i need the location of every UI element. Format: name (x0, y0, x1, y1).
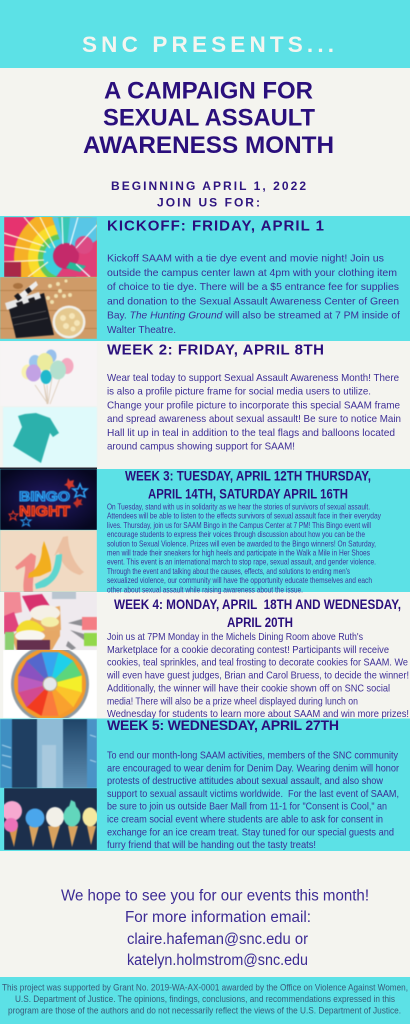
week 4 body text (106, 632, 409, 720)
subtitle: date and invitation: JOIN US FOR: (157, 196, 260, 210)
footer: grant disclaimer (0, 977, 410, 1024)
week 2 body text: around campus showing support for SAAM! (107, 442, 295, 453)
header text: SNC presents: SNC PRESENTS... (82, 32, 334, 57)
week 5 body text (107, 751, 400, 851)
image: tie dye (4, 217, 97, 277)
disclaimer text (2, 983, 408, 1015)
image: decorated cookies (4, 590, 97, 650)
week 5 heading: WEEK 5: WEDNESDAY, APRIL 27TH (107, 717, 339, 733)
week 5 body text: furry friend that will be handing out the tasty treats! (107, 840, 316, 851)
week 3 body text: other about sexual assault while raising awareness about the issue. (107, 585, 303, 594)
title: AWARENESS MONTH (83, 132, 334, 159)
title: SEXUAL ASSAULT (103, 104, 315, 132)
image: teal t-shirt (3, 407, 97, 467)
title: A CAMPAIGN FOR (104, 78, 313, 104)
week 4 body text: Join us at 7PM Monday in the Michels Dining Room above Ruth's (107, 632, 363, 643)
kickoff body text: of choice to tie dye. There will be a $5 entrance fee for supplies (107, 282, 399, 293)
image: balloons (0, 342, 97, 406)
kickoff heading: KICKOFF: FRIDAY, APRIL 1 (107, 218, 324, 234)
closing message and contact emails: claire.hafeman@snc.edu or (127, 931, 308, 948)
week 4 body text: media! There will also be a prize wheel displayed during lunch on (107, 696, 358, 707)
week 3 heading (125, 469, 371, 502)
kickoff body text: Kickoff SAAM with a tie dye event and movie night! Join us (107, 254, 384, 265)
week 2 body text (107, 373, 401, 453)
kickoff body text (107, 254, 400, 336)
week 2 body text: is also a profile picture frame for social media users to utilize. (107, 387, 371, 398)
closing message and contact emails: We hope to see you for our events this month! (61, 888, 369, 905)
title (83, 78, 334, 159)
panel: week 4 (3, 590, 409, 723)
week 2 body text: and spread awareness about sexual assault! Be sure to notice Main (107, 414, 401, 425)
closing message and contact emails: katelyn.holmstrom@snc.edu (127, 952, 308, 969)
subtitle: date and invitation (111, 179, 306, 210)
panel background: week 4 (97, 592, 410, 718)
week 3 heading: APRIL 14TH, SATURDAY APRIL 16TH (148, 487, 348, 502)
week 2 body text: Hall lit up in teal in addition to the teal flags and balloons located (107, 428, 395, 439)
image: ice cream cones (2, 788, 98, 850)
subtitle: date and invitation: BEGINNING APRIL 1, 2022 (111, 179, 306, 193)
week 4 body text: Marketplace for a cookie decorating contest! Participants will receive (107, 645, 389, 656)
image: bingo night neon sign: NIGHT (19, 503, 70, 520)
week 5 body text: protests of destructive attitudes about sexual assault, and also show (107, 776, 384, 787)
kickoff body text: outside the campus center lawn at 4pm with your clothing item (107, 268, 397, 279)
week 2 body text: Wear teal today to support Sexual Assault Awareness Month! There (107, 373, 399, 384)
week 3 heading: WEEK 3: TUESDAY, APRIL 12TH THURSDAY, (125, 469, 371, 484)
week 4 heading (114, 597, 401, 630)
closing message and contact emails (61, 888, 369, 969)
image: clapperboard and popcorn (0, 277, 97, 339)
image: high heels (0, 530, 97, 592)
week 2 body text: Change your profile picture to incorporate this special SAAM frame (107, 400, 400, 411)
image: prize wheel (3, 650, 97, 718)
panel: week 2 (0, 341, 410, 469)
header band (0, 0, 410, 68)
panel: week 5 (0, 717, 410, 851)
kickoff body text: Bay. The Hunting Ground will also be streamed at 7 PM inside of (107, 311, 400, 322)
panel: kickoff (0, 208, 410, 341)
week 3 body text (107, 502, 382, 594)
image: bingo night neon sign (0, 469, 97, 530)
kickoff body text: Walter Theatre. (107, 325, 176, 336)
image: bingo night neon sign: BINGO (19, 488, 70, 504)
kickoff body text: and donation to the Sexual Assault Awareness Center of Green (107, 296, 399, 307)
week 4 heading: APRIL 20TH (227, 615, 293, 630)
panel: week 3 (0, 469, 410, 594)
week 5 body text: ice cream social event where students are able to ask for consent in (107, 814, 383, 825)
image: denim jeans (0, 719, 97, 788)
week 2 heading: WEEK 2: FRIDAY, APRIL 8TH (107, 342, 324, 358)
closing message and contact emails: For more information email: (125, 909, 311, 926)
disclaimer text: U.S. Department of Justice. The opinions, findings, conclusions, and recommendations expressed in this (15, 994, 396, 1004)
